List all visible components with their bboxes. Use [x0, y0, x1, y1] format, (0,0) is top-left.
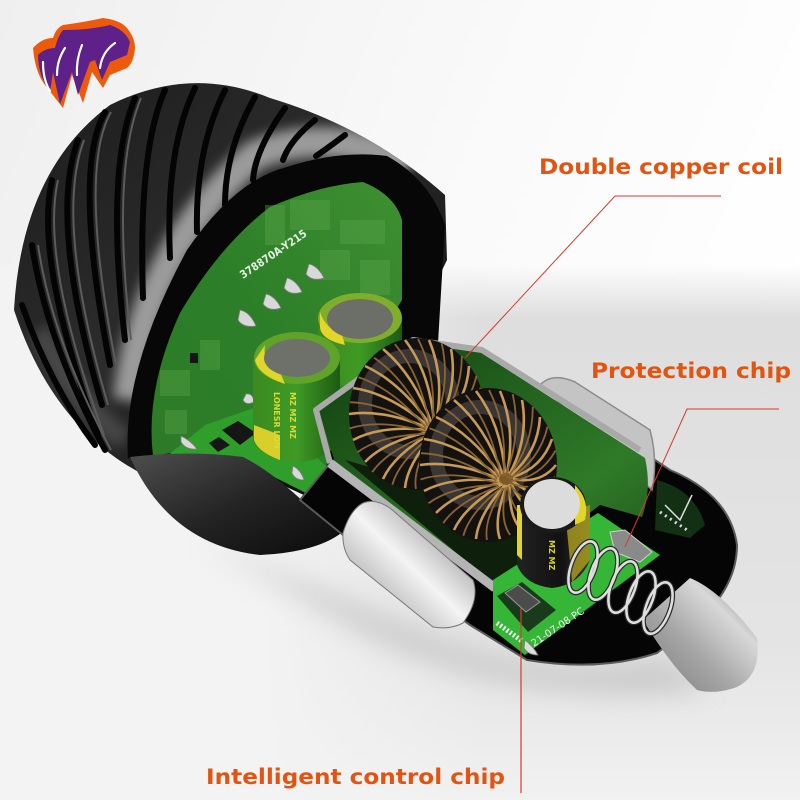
- rear lobe of the body: [130, 454, 345, 555]
- upper side pin: [540, 378, 655, 490]
- rear capacitors: [253, 293, 402, 462]
- solder pins: [181, 264, 324, 480]
- callout: double copper coil: [465, 155, 783, 358]
- front capacitor: [517, 477, 590, 588]
- rear capacitors: MZ MZ MZ: [288, 392, 297, 439]
- logo: claw mark: [33, 18, 135, 108]
- protection chip: [610, 530, 652, 562]
- callout: double copper coil: Double copper coil: [539, 155, 783, 179]
- green circuit board: [152, 182, 402, 500]
- left side pin: [343, 501, 475, 628]
- drum head with ribs: [14, 83, 447, 490]
- callout: intelligent control chip: Intelligent control chip: [206, 765, 505, 789]
- black rim around the cutaway: [127, 154, 445, 505]
- charger: [14, 83, 758, 694]
- board serial number: 378870A-Y215: [237, 227, 309, 281]
- black front shell: [300, 450, 737, 665]
- intelligent control chip: [497, 582, 556, 641]
- board date text: 21-07-08 PC: [530, 606, 587, 649]
- metal coil cage: [316, 340, 648, 588]
- green reflection with icon: [655, 480, 705, 538]
- small chips: [190, 353, 256, 452]
- front capacitor: MZ MZ: [547, 540, 556, 571]
- callout: protection chip: [591, 359, 791, 547]
- double copper coil: [337, 329, 568, 550]
- callout: protection chip: Protection chip: [591, 359, 791, 383]
- rear capacitors: LONESR LON: [272, 392, 281, 449]
- spring and plunger: [562, 538, 758, 692]
- front circuit board: [493, 513, 660, 655]
- soft ground shadow: [200, 540, 702, 694]
